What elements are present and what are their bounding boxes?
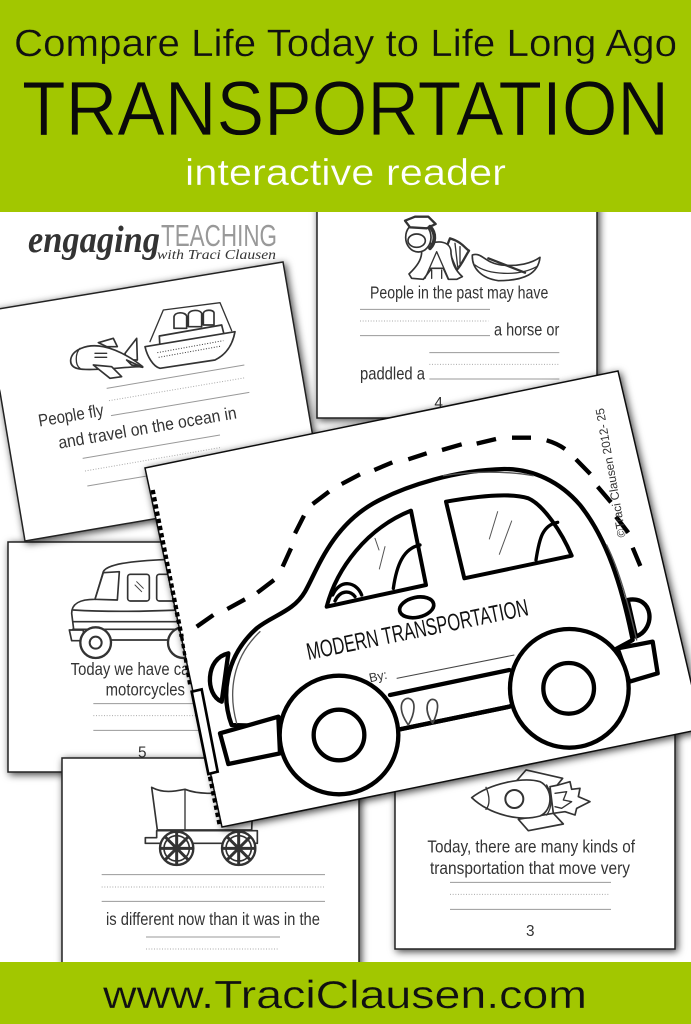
text: horse sentence: a horse or bbox=[494, 320, 560, 340]
page number 5: 5 bbox=[138, 744, 147, 761]
page number 4: 4 bbox=[434, 395, 443, 412]
icon: covered wagon bbox=[145, 787, 257, 865]
page number 3: 3 bbox=[526, 923, 535, 940]
icon: plane bbox=[71, 338, 143, 378]
text: horse sentence: People in the past may have bbox=[370, 282, 548, 302]
text: bus sentence: Today we have cars and bbox=[71, 659, 231, 679]
icon: canoe bbox=[472, 254, 540, 281]
icon: car bbox=[210, 469, 658, 794]
author line: By: bbox=[368, 668, 389, 685]
text: horse sentence: paddled a bbox=[360, 363, 425, 383]
text: bus sentence: motorcycles bbox=[106, 680, 185, 700]
text: horse sentence bbox=[360, 282, 560, 383]
panel: page 4 horse and canoe bbox=[317, 190, 597, 418]
dashed cut line bbox=[197, 438, 640, 627]
panel: page 3 rocket bbox=[395, 700, 675, 949]
icon: ship bbox=[145, 303, 235, 368]
text: rocket sentence bbox=[427, 836, 635, 878]
subtitle: interactive reader: interactive reader bbox=[185, 152, 506, 193]
icon: rocket bbox=[472, 770, 590, 831]
logo: Engaging Teaching with Traci Clausen: with Traci Clausen bbox=[157, 248, 276, 263]
title: Compare Life Today: Compare Life Today to Life Long Ago bbox=[14, 23, 677, 65]
logo: Engaging Teaching with Traci Clausen bbox=[28, 218, 277, 263]
text: plane sentence: and travel on the ocean in bbox=[57, 402, 238, 453]
panel: cover page Modern Transportation bbox=[145, 371, 691, 827]
cover title: MODERN TRANSPORTATION bbox=[304, 594, 531, 666]
icon: horse bbox=[405, 217, 469, 279]
website URL: www.TraciClausen.com bbox=[102, 974, 587, 1017]
logo: Engaging Teaching with Traci Clausen: engaging bbox=[28, 219, 160, 261]
panel: page wagon bbox=[62, 758, 359, 998]
spiral binding edge bbox=[153, 490, 220, 827]
text: wagon sentence: is different now than it was in the bbox=[106, 909, 320, 929]
icon: bus bbox=[69, 559, 199, 658]
panel: page 5 bus bbox=[8, 542, 308, 772]
footer band bbox=[0, 962, 691, 1024]
text: rocket sentence: Today, there are many kinds of bbox=[427, 836, 635, 856]
text: bus sentence bbox=[71, 659, 231, 700]
panel: page plane and ship bbox=[0, 262, 322, 541]
logo: Engaging Teaching with Traci Clausen: TEACHING bbox=[161, 218, 277, 253]
text: rocket sentence: transportation that move very bbox=[430, 858, 630, 878]
copyright: ©Traci Clausen 2012- 25 bbox=[593, 407, 629, 539]
text: plane sentence: People fly bbox=[37, 400, 105, 431]
header band bbox=[0, 0, 691, 212]
